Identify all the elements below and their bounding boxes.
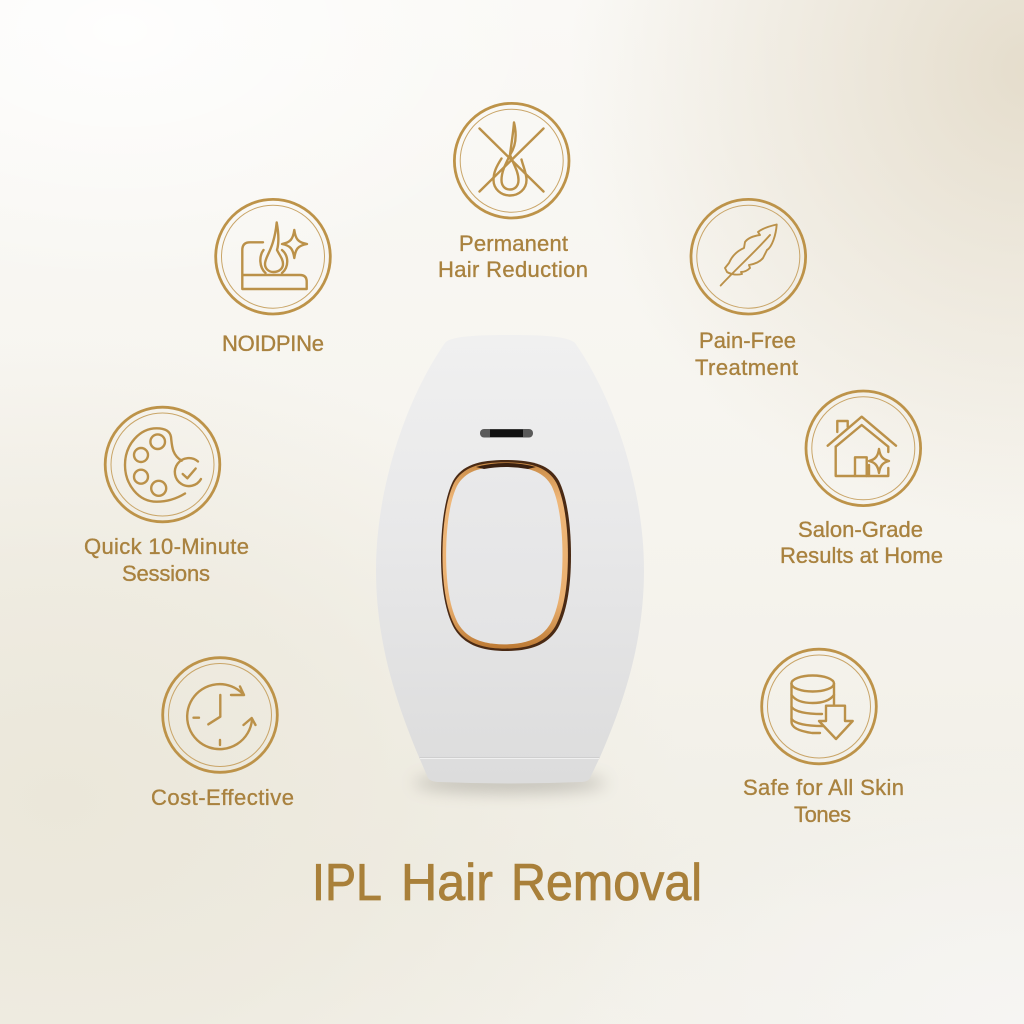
feature: safe for all skin tones xyxy=(743,649,904,827)
label xyxy=(780,517,943,568)
sensor slot xyxy=(480,429,533,438)
icon: stacked layers with down arrow xyxy=(791,676,853,739)
device body xyxy=(376,335,644,784)
label: Quick 10-Minute xyxy=(84,534,249,559)
label: Salon-Grade xyxy=(798,517,923,542)
icon: palette with check xyxy=(125,428,201,502)
badge ring xyxy=(216,199,330,314)
label: Permanent xyxy=(459,231,568,256)
label: Hair Reduction xyxy=(438,257,588,282)
feature: cost-effective xyxy=(151,658,294,810)
icon: skin with hair and sparkle xyxy=(242,222,307,289)
label: Pain-Free xyxy=(699,328,796,353)
title xyxy=(312,853,702,911)
title: Hair xyxy=(401,853,493,911)
label: Results at Home xyxy=(780,543,943,568)
device shadow xyxy=(414,773,606,793)
badge ring xyxy=(806,391,921,506)
device base seam xyxy=(420,758,600,759)
badge ring xyxy=(163,658,277,772)
badge ring xyxy=(691,199,806,314)
badge ring xyxy=(762,649,876,764)
icon: house with sparkle xyxy=(828,417,896,476)
label xyxy=(743,775,904,827)
feature: pain-free treatment xyxy=(691,199,806,380)
label: Tones xyxy=(794,802,851,827)
badge ring xyxy=(454,103,569,218)
badge ring xyxy=(105,407,220,522)
label: Cost-Effective xyxy=(151,785,294,810)
label xyxy=(695,328,798,380)
feature: noidpine xyxy=(216,199,330,356)
icon: clock with arrows xyxy=(187,684,256,749)
label xyxy=(84,534,249,586)
label xyxy=(438,231,588,282)
label: Sessions xyxy=(122,561,210,586)
gold lens ring xyxy=(441,460,571,651)
icon: feather xyxy=(721,224,777,286)
title: Removal xyxy=(511,853,702,911)
feature: permanent hair reduction xyxy=(438,103,588,282)
feature: quick 10-minute sessions xyxy=(84,407,249,586)
feature: salon-grade results at home xyxy=(780,391,943,568)
device xyxy=(376,335,644,793)
icon: crossed-out hair follicle xyxy=(480,122,544,196)
label: Safe for All Skin xyxy=(743,775,904,800)
label: Treatment xyxy=(695,355,798,380)
label: NOIDPINe xyxy=(222,331,324,356)
title: IPL xyxy=(312,853,382,911)
